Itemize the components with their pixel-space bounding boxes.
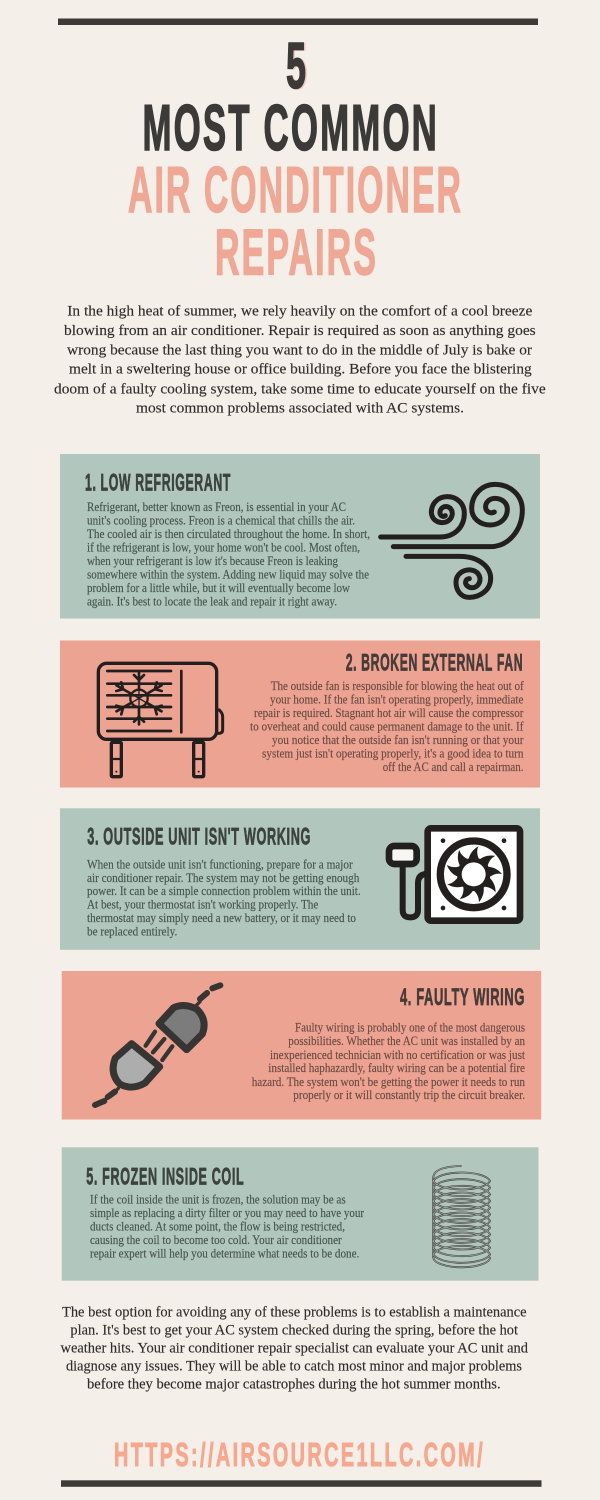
panel: 4 faulty wiring bbox=[62, 971, 541, 1120]
intro paragraph bbox=[54, 304, 546, 417]
text: low refrigerant body: The cooled air is then circulated throughout the home. In short, bbox=[87, 527, 370, 541]
intro paragraph: melt in a sweltering house or office building. Before you face the blistering bbox=[69, 362, 532, 378]
icon: fan unit with thermostat bbox=[389, 828, 520, 921]
intro paragraph: In the high heat of summer, we rely heavily on the comfort of a cool breeze bbox=[67, 304, 533, 320]
heading: outside unit: 3. OUTSIDE UNIT ISN'T WORKING bbox=[87, 823, 311, 850]
text: low refrigerant body: unit's cooling process. Freon is a chemical that chills the air. bbox=[87, 514, 355, 528]
title: 5 bbox=[286, 29, 306, 102]
closing paragraph: diagnose any issues. They will be able to catch most minor and major problems bbox=[66, 1359, 522, 1375]
text: low refrigerant body: when your refrigerant is low it's because Freon is leaking bbox=[87, 554, 338, 568]
panel: 2 broken external fan bbox=[60, 640, 540, 788]
text: broken fan body: repair is required. Stagnant hot air will cause the compressor bbox=[254, 706, 524, 720]
title bbox=[128, 29, 463, 288]
text: faulty wiring body: possibilities. Whether the AC unit was installed by an bbox=[288, 1034, 525, 1048]
text: outside unit body: air conditioner repair. The system may not be getting enough bbox=[87, 871, 359, 885]
text: outside unit body: thermostat may simply need a new battery, or it may need to bbox=[87, 911, 356, 925]
text: outside unit body: When the outside unit isn't functioning, prepare for a major bbox=[87, 857, 353, 871]
text: outside unit body: power. It can be a simple connection problem within the unit. bbox=[87, 884, 361, 898]
panel: 5 frozen inside coil bbox=[62, 1147, 538, 1281]
text: faulty wiring body: hazard. The system won't be getting the power it needs to run bbox=[252, 1075, 525, 1089]
panel: 3 outside unit not working bbox=[60, 808, 540, 950]
text: low refrigerant body bbox=[87, 500, 370, 608]
text: outside unit body: At best, your thermostat isn't working properly. The bbox=[87, 898, 319, 912]
closing paragraph: before they become major catastrophes during the hot summer months. bbox=[87, 1377, 501, 1393]
closing paragraph: plan. It's best to get your AC system checked during the spring, before the hot bbox=[70, 1323, 519, 1339]
top rule bbox=[58, 18, 538, 25]
text: frozen coil body bbox=[90, 1193, 364, 1261]
intro paragraph: doom of a faulty cooling system, take some time to educate yourself on the five bbox=[54, 381, 546, 397]
text: low refrigerant body: again. It's best to locate the leak and repair it right away. bbox=[87, 594, 337, 608]
text: frozen coil body: If the coil inside the unit is frozen, the solution may be as bbox=[90, 1193, 346, 1207]
text: frozen coil body: simple as replacing a dirty filter or you may need to have your bbox=[90, 1206, 364, 1220]
text: broken fan body: The outside fan is responsible for blowing the heat out of bbox=[271, 679, 525, 693]
heading: low refrigerant: 1. LOW REFRIGERANT bbox=[85, 470, 231, 496]
title: 5 bbox=[288, 30, 308, 102]
icon: coil bbox=[433, 1166, 490, 1267]
text: outside unit body: be replaced entirely. bbox=[87, 925, 177, 939]
intro paragraph: wrong because the last thing you want to do in the middle of July is bake or bbox=[67, 342, 532, 358]
closing paragraph: weather hits. Your air conditioner repair specialist can evaluate your AC unit and bbox=[60, 1341, 528, 1357]
panel: 1 low refrigerant bbox=[60, 454, 540, 618]
text: broken fan body: your home. If the fan isn't operating properly, immediate bbox=[270, 692, 524, 706]
intro paragraph: blowing from an air conditioner. Repair is required as soon as anything goes bbox=[64, 323, 536, 339]
text: broken fan body: you notice that the outside fan isn't running or that your bbox=[272, 733, 524, 747]
icon: plug and socket bbox=[95, 985, 220, 1105]
text: faulty wiring body: inexperienced technician with no certification or was just bbox=[270, 1048, 526, 1062]
intro paragraph: most common problems associated with AC systems. bbox=[136, 401, 464, 417]
text: faulty wiring body: Faulty wiring is probably one of the most dangerous bbox=[295, 1021, 525, 1035]
text: broken fan body: system just isn't operating properly, it's a good idea to turn bbox=[262, 746, 524, 760]
text: low refrigerant body: Refrigerant, better known as Freon, is essential in your AC bbox=[87, 500, 346, 514]
title: REPAIRS bbox=[215, 216, 378, 288]
text: broken fan body: to overheat and could cause permanent damage to the unit. If bbox=[250, 719, 524, 733]
text: low refrigerant body: problem for a little while, but it will eventually become low bbox=[87, 581, 350, 595]
icon: wind bbox=[381, 484, 522, 597]
text: faulty wiring body: properly or it will constantly trip the circuit breaker. bbox=[293, 1088, 525, 1102]
closing paragraph: The best option for avoiding any of these problems is to establish a maintenance bbox=[62, 1305, 527, 1321]
text: frozen coil body: repair expert will help you determine what needs to be done. bbox=[90, 1247, 359, 1261]
bottom rule bbox=[61, 1480, 542, 1487]
text: broken fan body bbox=[250, 679, 525, 774]
text: low refrigerant body: if the refrigerant is low, your home won't be cool. Most often, bbox=[87, 540, 360, 554]
text: frozen coil body: causing the coil to become too cold. Your air conditioner bbox=[90, 1233, 342, 1247]
closing paragraph bbox=[60, 1305, 528, 1393]
text: faulty wiring body: installed haphazardly, faulty wiring can be a potential fire bbox=[268, 1061, 525, 1075]
icon: outdoor ac unit with snowflake bbox=[98, 663, 223, 777]
text: frozen coil body: ducts cleaned. At some point, the flow is being restricted, bbox=[90, 1220, 345, 1234]
heading: frozen coil: 5. FROZEN INSIDE COIL bbox=[86, 1163, 244, 1190]
text: faulty wiring body bbox=[252, 1021, 526, 1102]
text: outside unit body bbox=[87, 857, 361, 939]
text: low refrigerant body: somewhere within the system. Adding new liquid may solve the bbox=[87, 567, 369, 581]
text: broken fan body: off the AC and call a repairman. bbox=[383, 760, 524, 774]
